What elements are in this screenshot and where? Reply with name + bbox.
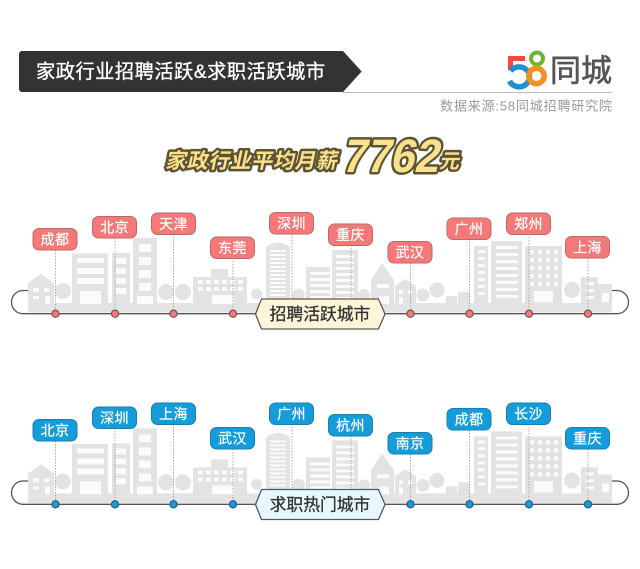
- label: job seeker hot cities: [256, 490, 385, 520]
- seeker city markers: 重庆: [573, 430, 602, 446]
- seeker city markers: 成都: [455, 412, 483, 428]
- salary headline: [164, 130, 463, 183]
- logo: 58同城: [510, 52, 612, 88]
- hiring city markers: 深圳: [277, 216, 306, 232]
- salary headline: 元: [438, 151, 463, 173]
- hiring city markers: 成都: [41, 232, 69, 248]
- seeker city markers: 南京: [396, 436, 424, 452]
- seeker city markers: 上海: [159, 406, 188, 422]
- title banner: [19, 51, 362, 92]
- seeker city markers: 深圳: [100, 410, 129, 426]
- hiring city markers: 东莞: [218, 240, 247, 256]
- label: job seeker hot cities: 求职热门城市: [270, 496, 370, 514]
- hiring city markers: 郑州: [514, 216, 543, 232]
- seeker city markers: [33, 403, 610, 508]
- data source: 数据来源:58同城招聘研究院: [440, 98, 612, 114]
- hiring city markers: 天津: [159, 216, 188, 232]
- skyline illustration: [28, 428, 612, 503]
- hiring city markers: 重庆: [336, 227, 365, 243]
- hiring city markers: 广州: [455, 221, 483, 237]
- seeker city markers: 杭州: [336, 418, 365, 434]
- hiring city markers: [33, 212, 610, 317]
- skyline illustration: [28, 238, 612, 312]
- title banner: 家政行业招聘活跃&求职活跃城市: [36, 61, 325, 83]
- logo: 58同城: 同城: [550, 54, 612, 88]
- timeline track: [12, 481, 628, 504]
- salary headline: 家政行业平均月薪: [164, 148, 341, 173]
- hiring city markers: 武汉: [396, 244, 424, 260]
- panel: job seeker hot cities: [12, 403, 628, 520]
- salary headline: 7762: [339, 130, 447, 183]
- panel: hiring active cities: [11, 212, 628, 329]
- hiring city markers: 上海: [573, 240, 602, 256]
- seeker city markers: 北京: [41, 422, 69, 438]
- seeker city markers: 广州: [277, 406, 306, 422]
- label: hiring active cities: [256, 299, 385, 329]
- seeker city markers: 武汉: [218, 430, 247, 446]
- header rule: [343, 92, 612, 94]
- hiring city markers: 北京: [100, 220, 129, 236]
- label: hiring active cities: 招聘活跃城市: [270, 305, 370, 324]
- timeline track: [11, 290, 628, 314]
- seeker city markers: 长沙: [514, 406, 543, 422]
